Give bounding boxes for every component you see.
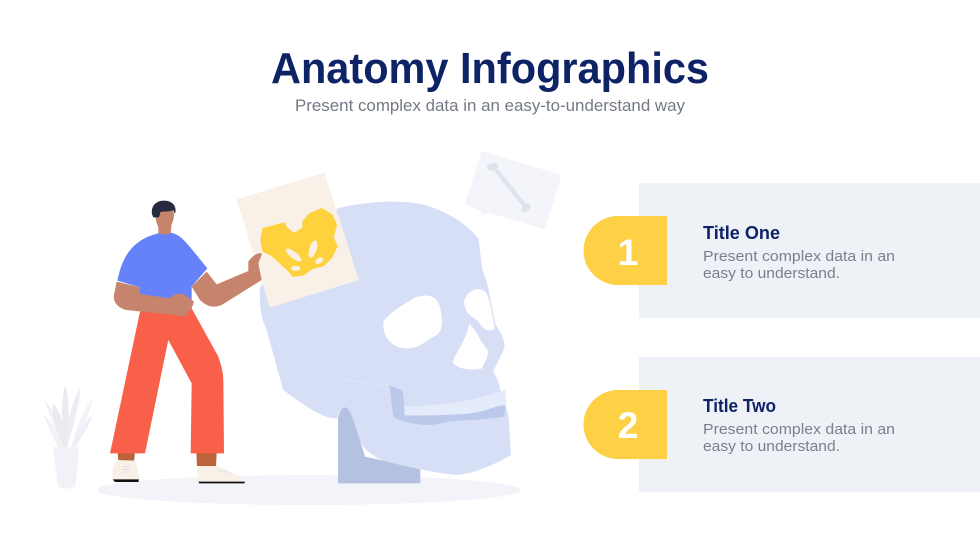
subtitle: Present complex data in an easy-to-understand way (295, 96, 685, 115)
title one: Title One (703, 223, 780, 243)
shirt (117, 233, 207, 300)
x-ray paper (237, 173, 359, 308)
person holding x-ray (110, 173, 359, 483)
description two: easy to understand. (703, 438, 840, 455)
eye socket (383, 296, 442, 348)
shoes (112, 460, 245, 482)
hair (152, 201, 176, 217)
skull illustration (260, 202, 511, 483)
description one: easy to understand. (703, 265, 840, 282)
cheek suture (321, 381, 388, 385)
description two: Present complex data in an (703, 421, 895, 438)
panel: item two (584, 357, 980, 492)
teeth (404, 390, 507, 416)
shoe laces (123, 467, 228, 473)
bone card (465, 151, 562, 229)
number one: 1 (618, 232, 638, 273)
near arm (114, 282, 194, 317)
description one: Present complex data in an (703, 248, 895, 265)
number two: 2 (618, 405, 638, 446)
title two: Title Two (703, 396, 776, 416)
shoe soles (113, 479, 245, 483)
title: Anatomy Infographics (271, 44, 709, 93)
trousers (110, 308, 224, 453)
far eye socket (464, 289, 495, 331)
skull silhouette (260, 202, 511, 475)
nasal cavity (453, 324, 488, 370)
ground shadow (97, 475, 521, 505)
icon: bone (486, 162, 532, 214)
icon: plant in pot (43, 385, 93, 489)
head (155, 210, 174, 228)
pelvis x-ray (261, 209, 337, 276)
skull stand (338, 407, 420, 483)
badge two (584, 390, 667, 459)
jaw gap (389, 385, 505, 425)
far arm (192, 253, 262, 307)
ankles (118, 453, 217, 467)
badge one (584, 216, 667, 285)
neck (158, 223, 172, 235)
panel: item one (584, 183, 980, 318)
